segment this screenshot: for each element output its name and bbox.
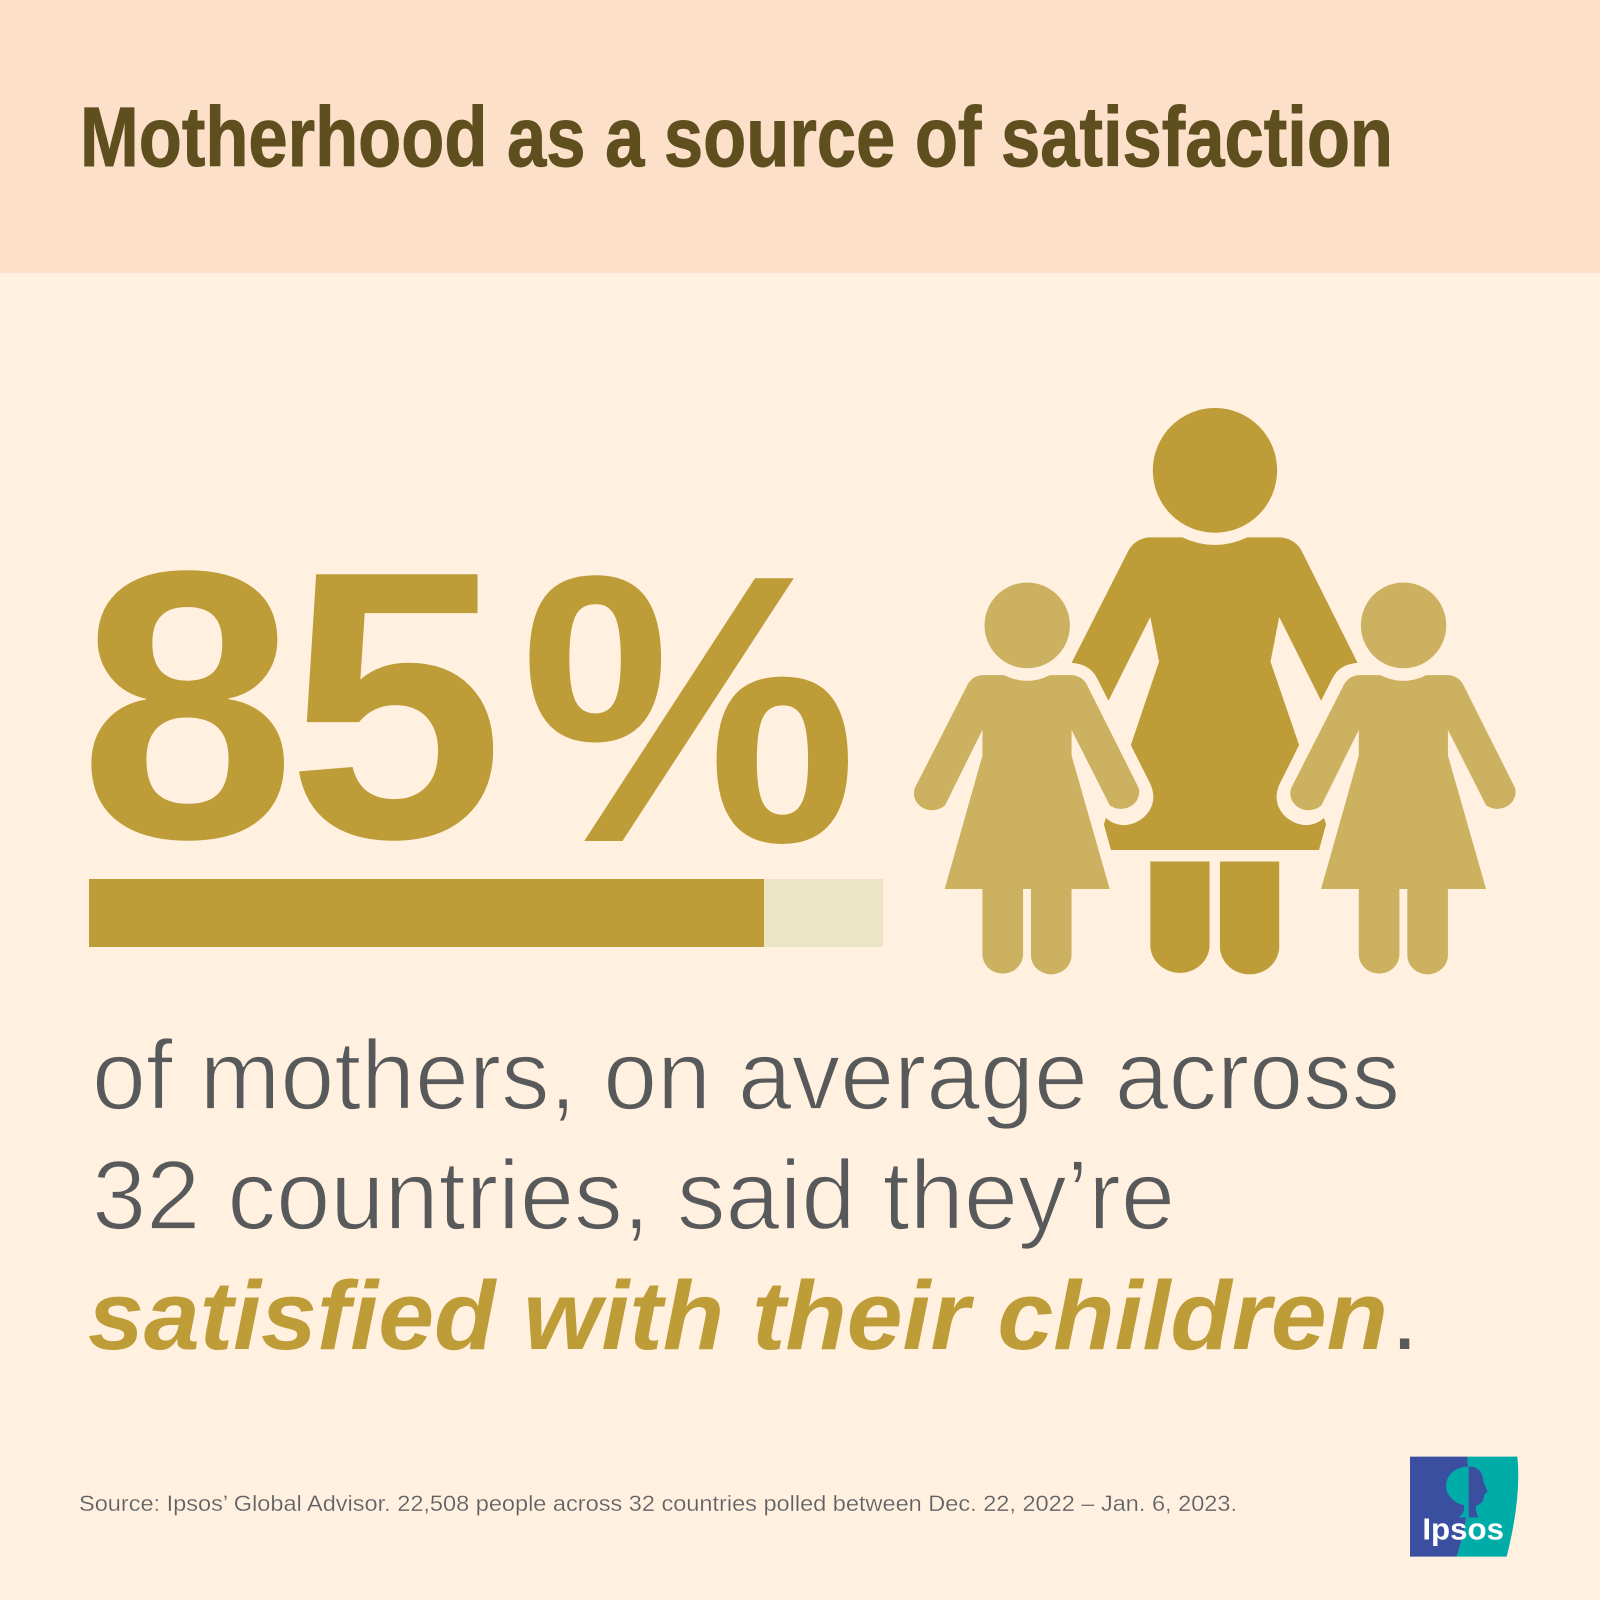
header band: [0, 0, 1600, 273]
icon: left daughter: [914, 582, 1139, 974]
head half: [1469, 1467, 1488, 1517]
source note: Source: Ipsos’ Global Advisor. 22,508 people across 32 countries polled between Dec. 22, 2022 – Jan. 6, 2023.: [79, 1491, 1237, 1516]
big statistic: 85%: [79, 491, 858, 922]
big statistic: 85%: %: [520, 495, 858, 922]
statement line 3: highlighted finding: .: [1391, 1260, 1418, 1370]
big statistic: 85%: 8: [79, 491, 296, 918]
logo: Ipsos: Ipsos: [1422, 1512, 1504, 1546]
icon: mother: [1072, 408, 1358, 974]
icon: mother with two daughters: [914, 408, 1516, 974]
statement line 3: highlighted finding: satisfied with their children: [88, 1261, 1388, 1370]
tree half: [1446, 1467, 1469, 1517]
big statistic: 85%: 5: [287, 491, 504, 918]
logo: Ipsos: [1410, 1457, 1518, 1557]
statement text: [88, 1020, 1418, 1370]
progress bar: 85 percent: [89, 879, 883, 947]
statement line 1: of mothers, on average across: [92, 1020, 1400, 1130]
title: Motherhood as a source of satisfaction: [80, 90, 1393, 184]
icon: right daughter: [1290, 582, 1516, 974]
statement line 2: 32 countries, said they’re: [92, 1140, 1175, 1250]
